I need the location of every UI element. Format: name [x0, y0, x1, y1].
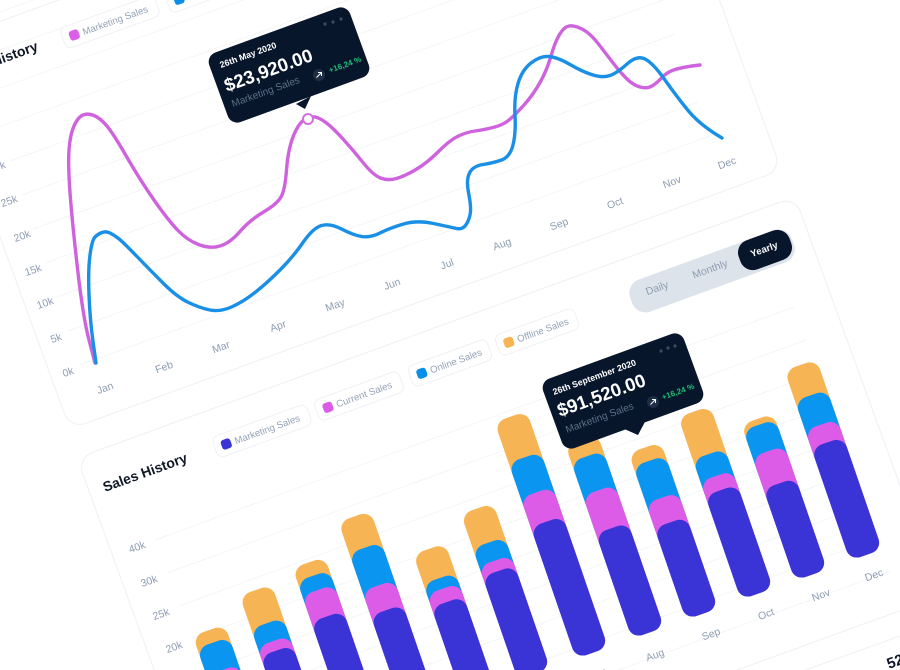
- y axis labels: 25k: [151, 606, 172, 623]
- y axis labels: [127, 539, 185, 656]
- x axis labels: Feb: [154, 359, 175, 376]
- x axis labels: Nov: [661, 173, 684, 191]
- x axis labels: Oct: [756, 606, 776, 623]
- x axis labels: Dec: [716, 155, 738, 172]
- y axis labels: 20k: [12, 228, 33, 245]
- bar: Apr: [338, 511, 439, 670]
- bar: Feb: [240, 584, 328, 670]
- x axis labels: Aug: [644, 647, 666, 664]
- bar: Mar: [293, 557, 384, 670]
- tooltip: September 2020: $91,520.00: [554, 369, 648, 421]
- period toggle: Monthly: [691, 257, 730, 281]
- x axis labels: May: [324, 296, 347, 315]
- legend: online sales: [407, 338, 493, 388]
- y axis labels: 15k: [23, 262, 44, 279]
- bar: May: [413, 543, 495, 670]
- line: online sales: [89, 56, 722, 363]
- legend: current sales: [313, 370, 405, 422]
- tooltip: May 2020: [206, 5, 372, 125]
- bar: Jul: [495, 411, 608, 659]
- y axis labels: 20k: [164, 639, 185, 656]
- y axis labels: 30k: [139, 573, 160, 590]
- tooltip: September 2020: 26th September 2020: [551, 357, 637, 397]
- line: marketing sales: [69, 26, 700, 363]
- period toggle: Yearly: [749, 240, 780, 260]
- legend: offline sales: [494, 307, 580, 357]
- y axis labels: 5k: [49, 331, 64, 346]
- legend: marketing sales: Marketing Sales: [81, 4, 150, 38]
- y axis labels: 40k: [127, 539, 148, 556]
- legend: partial blue chip: [164, 0, 256, 14]
- x axis labels: Sep: [700, 626, 722, 643]
- data point marker: [303, 114, 313, 124]
- x axis labels: Mar: [211, 339, 232, 356]
- tooltip: September 2020: [540, 331, 706, 451]
- period toggle: [625, 226, 799, 316]
- x axis labels: Apr: [268, 318, 288, 335]
- period toggle: Daily: [644, 279, 671, 298]
- x axis labels: Jul: [439, 257, 456, 272]
- tooltip: May 2020: Marketing Sales: [230, 75, 301, 110]
- y axis labels: [0, 159, 76, 380]
- bar: Jan: [193, 625, 274, 670]
- bar: Nov: [741, 413, 827, 581]
- x axis labels: Nov: [810, 586, 833, 604]
- x axis labels: Dec: [863, 567, 885, 584]
- bar: Dec: [784, 359, 882, 561]
- x axis labels: Jun: [382, 276, 402, 293]
- x axis labels: Sep: [548, 216, 570, 233]
- panel: stacked bar chart card: [77, 197, 900, 670]
- tooltip: May 2020: 26th May 2020: [218, 40, 278, 70]
- tooltip: September 2020: +16,24 %: [661, 382, 696, 402]
- x axis labels: Aug: [491, 236, 513, 253]
- legend: marketing sales: Marketing Sales: [233, 413, 302, 447]
- x axis labels: [592, 567, 885, 670]
- x axis labels: Oct: [605, 195, 625, 212]
- x axis labels: [95, 155, 738, 397]
- tooltip: September 2020: Marketing Sales: [564, 401, 635, 436]
- legend: offline sales: Offline Sales: [516, 316, 571, 345]
- panel: next card edge: [800, 636, 900, 670]
- x axis labels: Jan: [95, 380, 115, 397]
- bar: Oct: [678, 406, 773, 600]
- y axis labels: 10k: [35, 295, 56, 312]
- legend: online sales: Online Sales: [429, 347, 484, 376]
- bar: Jun: [461, 503, 550, 670]
- legend: current sales: Current Sales: [335, 380, 394, 410]
- tooltip: May 2020: $23,920.00: [221, 44, 315, 96]
- bar: Aug: [565, 434, 664, 639]
- y axis labels: 0k: [61, 365, 76, 380]
- legend: marketing sales: [211, 404, 313, 458]
- tooltip: May 2020: +16,24 %: [328, 55, 363, 75]
- bar: Sep: [629, 442, 718, 620]
- heading: bar chart title: Sales History: [101, 449, 190, 495]
- legend: marketing sales: [59, 0, 161, 49]
- panel: line chart card: [0, 0, 781, 429]
